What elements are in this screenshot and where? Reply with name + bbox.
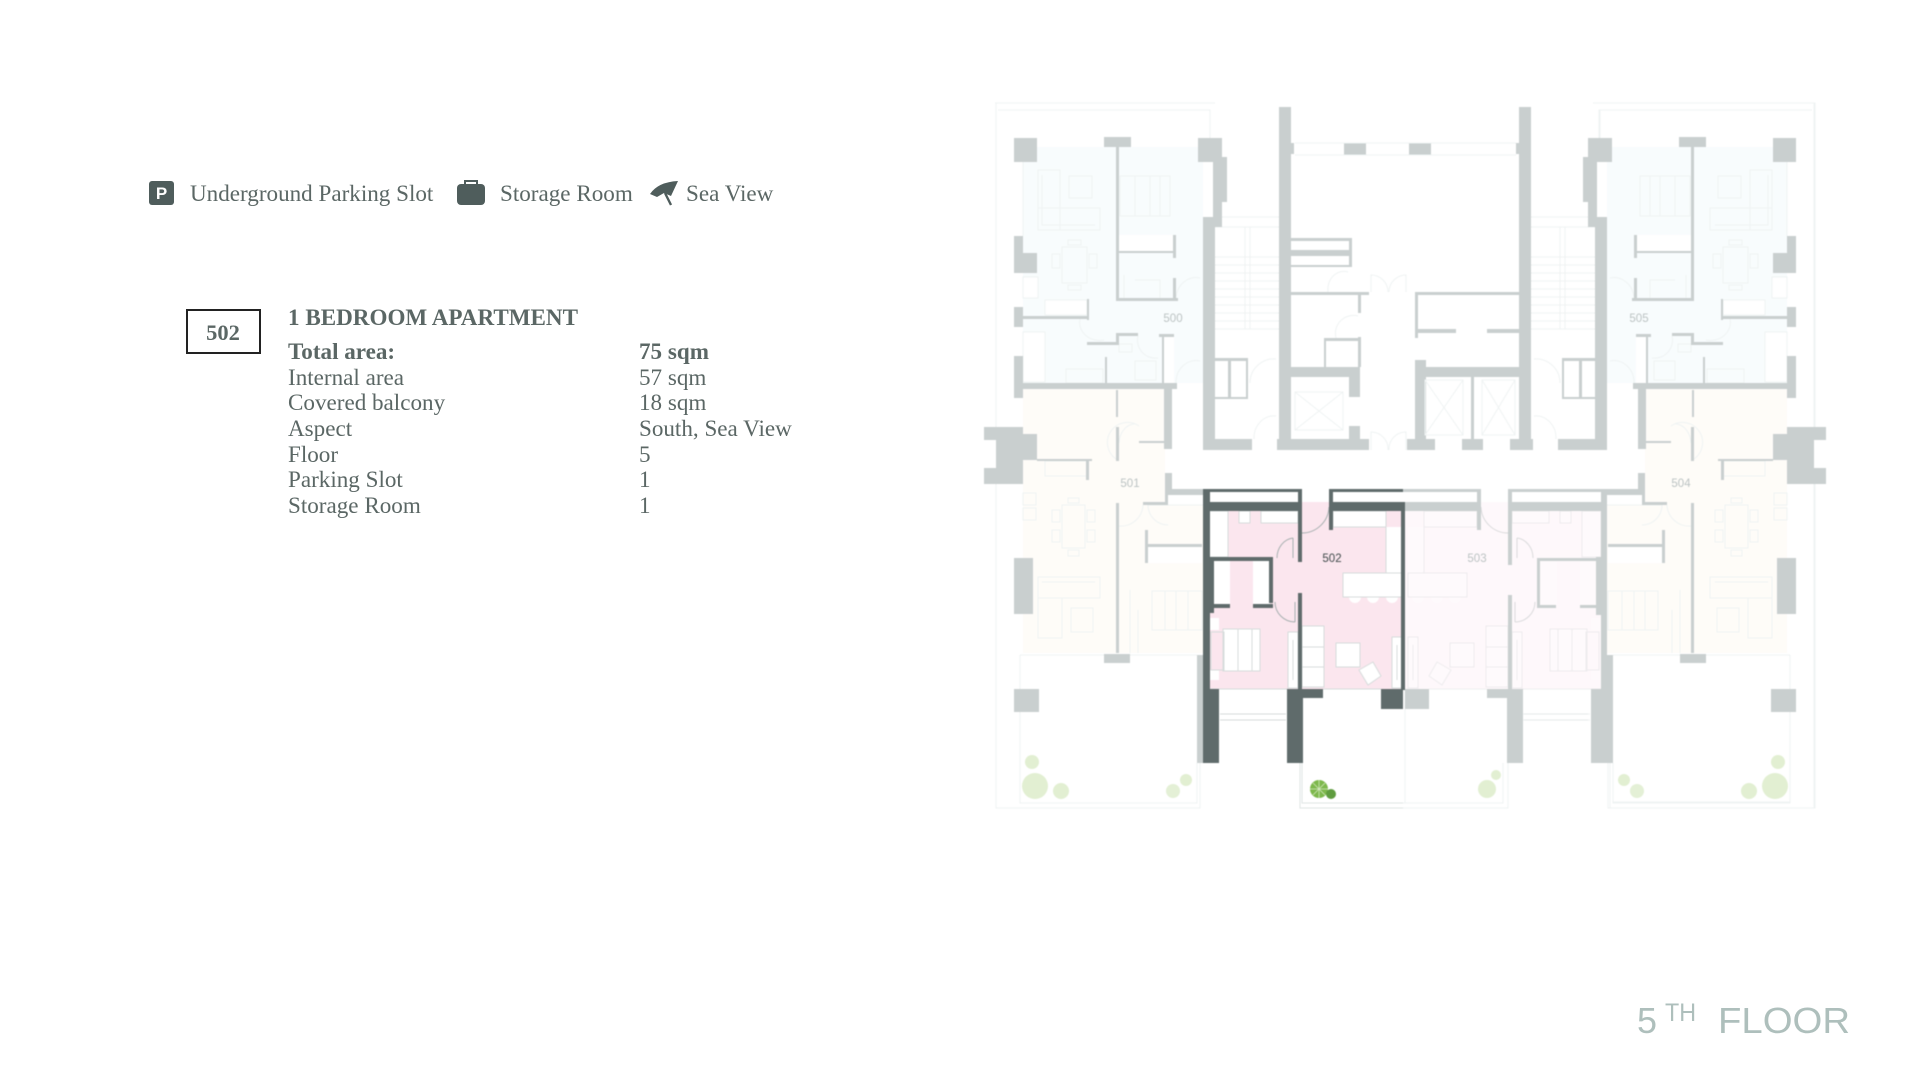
- legend label: sea view: Sea View: [686, 180, 774, 206]
- apartment 505 fill: [1607, 147, 1787, 383]
- unit number box: [187, 310, 260, 353]
- right wing walls and furniture: [1519, 103, 1826, 808]
- details heading: 1 BEDROOM APARTMENT: [288, 305, 578, 330]
- row: aspect: [288, 415, 792, 441]
- row: aspect: Aspect: [288, 415, 353, 441]
- row: parking slot: 1: [639, 466, 651, 492]
- balcony lines: [1403, 103, 1815, 808]
- trees: pale balcony 503: [1478, 770, 1501, 798]
- apartment 502 walls: [1203, 489, 1405, 763]
- apartment 502 furniture: [1209, 497, 1402, 720]
- row: covered balcony: Covered balcony: [288, 389, 446, 415]
- apartment numbers: [1120, 313, 1691, 565]
- apartment 503 fill: [1405, 502, 1601, 689]
- apartment numbers: 504: [1671, 478, 1691, 490]
- row: internal area: Internal area: [288, 364, 404, 390]
- apartment numbers: 500: [1163, 313, 1183, 325]
- row: storage room: Storage Room: [288, 492, 421, 518]
- row: covered balcony: 18 sqm: [639, 389, 706, 415]
- icon: parking: P: [156, 184, 167, 203]
- row: floor: 5: [639, 441, 651, 467]
- white service areas in side apartments: [1023, 235, 1787, 563]
- apartment numbers: 502: [1322, 553, 1342, 565]
- core doors and lift shafts: [1295, 143, 1516, 450]
- row: total area: 75 sqm: [639, 338, 709, 364]
- row: covered balcony: [288, 389, 706, 415]
- legend: [149, 180, 774, 206]
- left wing walls and furniture: [984, 103, 1291, 808]
- apartment 504 fill: [1607, 389, 1787, 653]
- apartment numbers: 505: [1629, 313, 1649, 325]
- apartment 502 fill: [1209, 502, 1403, 689]
- apartment numbers: 503: [1467, 553, 1487, 565]
- floor title: 5: [1637, 1000, 1657, 1041]
- row: aspect: South, Sea View: [639, 415, 792, 441]
- trees: highlighted balcony: [1310, 780, 1336, 799]
- row: parking slot: Parking Slot: [288, 466, 403, 492]
- floor title: [1637, 999, 1850, 1041]
- apartment numbers: 501: [1120, 478, 1140, 490]
- central core walls: [1277, 143, 1532, 450]
- apartment 501 fill: [1023, 389, 1203, 653]
- row: parking slot: [288, 466, 651, 492]
- floor title: FLOOR: [1718, 1000, 1850, 1041]
- icon: sea view umbrella: [650, 181, 678, 205]
- balcony lines of apartment 502: [1300, 763, 1403, 808]
- row: internal area: 57 sqm: [639, 364, 706, 390]
- apartment details: [288, 305, 792, 518]
- row: total area: Total area:: [288, 338, 395, 364]
- row: floor: Floor: [288, 441, 338, 467]
- legend label: parking: Underground Parking Slot: [190, 180, 434, 206]
- apartment 500 fill: [1023, 147, 1203, 383]
- icon: storage suitcase: [457, 181, 485, 205]
- row: internal area: [288, 364, 706, 390]
- row: floor: [288, 441, 651, 467]
- unit number box: 502: [206, 320, 240, 345]
- row: storage room: [288, 492, 651, 518]
- apartment 503 walls and furniture: [1403, 489, 1607, 763]
- row: total area: [288, 338, 709, 364]
- floor title: TH: [1665, 999, 1696, 1027]
- floor plan: [984, 103, 1826, 808]
- row: storage room: 1: [639, 492, 651, 518]
- icon: parking: [149, 181, 174, 205]
- legend label: storage: Storage Room: [500, 180, 633, 206]
